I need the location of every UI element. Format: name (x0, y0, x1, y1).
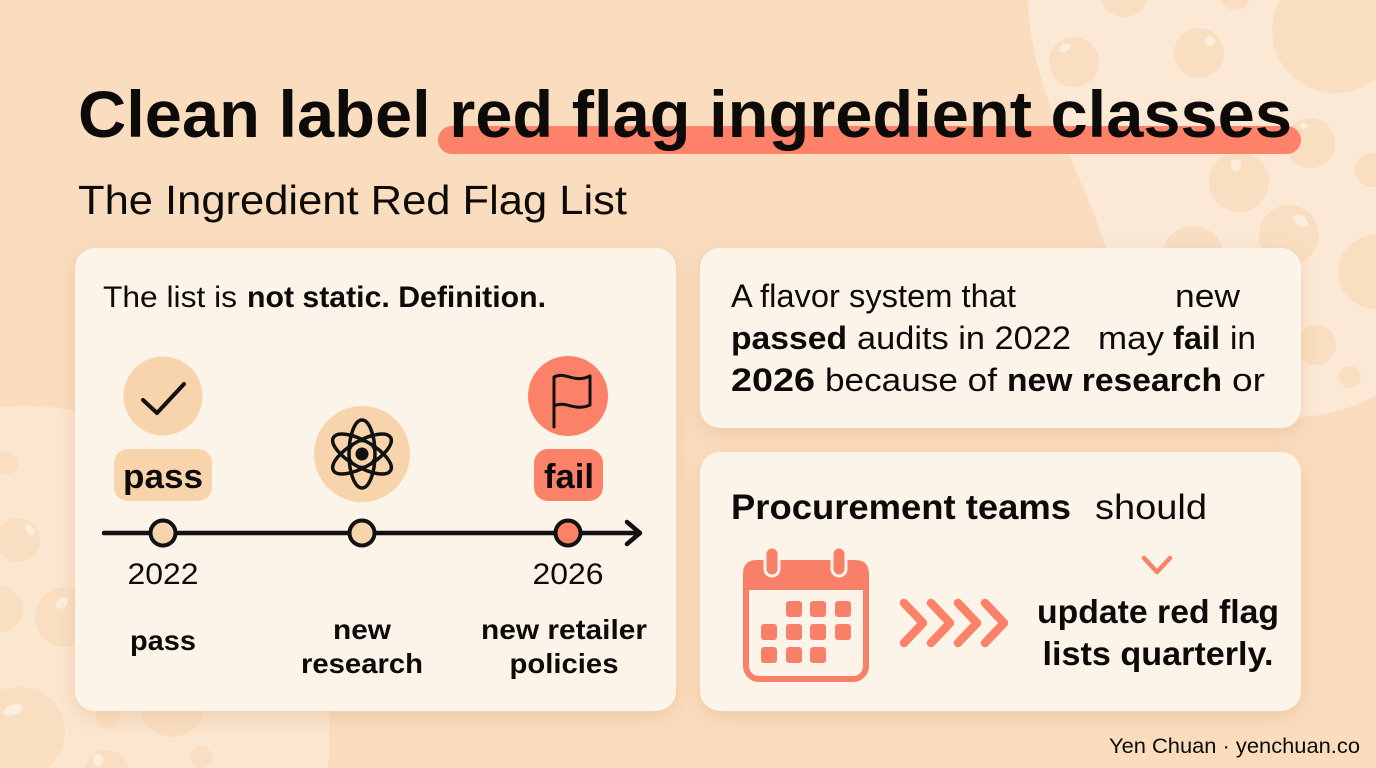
body text: may (1098, 320, 1164, 356)
fail badge (534, 449, 603, 501)
panel: procurement (700, 452, 1301, 711)
icon: check (124, 356, 202, 436)
body text: audits in 2022 (857, 320, 1071, 356)
panel heading (103, 281, 546, 314)
panel heading: The list is (103, 281, 237, 314)
panel heading: Procurement teams (731, 488, 1071, 527)
panel heading (731, 488, 1207, 527)
icon: atom (314, 406, 410, 502)
body text: or (1232, 362, 1265, 398)
icon: chevron arrows (904, 603, 1004, 643)
title: Clean label red flag ingredient classes (78, 77, 1292, 151)
icon: small chevron down (1144, 558, 1170, 572)
highlight bar (438, 126, 1301, 154)
timeline arrow (104, 520, 640, 546)
icon: flag (528, 356, 608, 436)
panel: flavor system text (700, 248, 1301, 428)
icon: calendar (743, 547, 869, 679)
label: new research: research (301, 648, 423, 679)
body text: A flavor system that (731, 278, 1016, 314)
fail badge: fail (544, 458, 594, 496)
label: new retailer policies (481, 614, 647, 679)
year: 2022: 2022 (128, 558, 198, 591)
panel: timeline (75, 248, 676, 711)
panel heading: should (1095, 488, 1207, 527)
pass badge (114, 449, 212, 501)
body text: in (1230, 320, 1256, 356)
body text (731, 278, 1265, 398)
callout text: update red flag (1037, 593, 1279, 630)
callout text: lists quarterly. (1042, 635, 1274, 672)
year: 2026: 2026 (532, 558, 604, 591)
body text: 2026 (731, 362, 815, 398)
callout text (1037, 593, 1279, 672)
body text: new research (1007, 362, 1222, 398)
label: new research (301, 614, 423, 679)
subtitle: The Ingredient Red Flag List (78, 177, 628, 223)
pass badge: pass (123, 458, 203, 496)
label: new retailer policies: new retailer (481, 614, 647, 645)
footer credit: Yen Chuan · yenchuan.co (1109, 735, 1360, 758)
label: new research: new (333, 614, 391, 645)
label: new retailer policies: policies (510, 648, 618, 679)
panel heading: not static. Definition. (247, 281, 546, 314)
body text: because of (825, 362, 997, 398)
body text: new (1175, 278, 1241, 314)
label: pass: pass (130, 625, 196, 656)
body text: passed (731, 320, 847, 356)
body text: fail (1173, 320, 1220, 356)
